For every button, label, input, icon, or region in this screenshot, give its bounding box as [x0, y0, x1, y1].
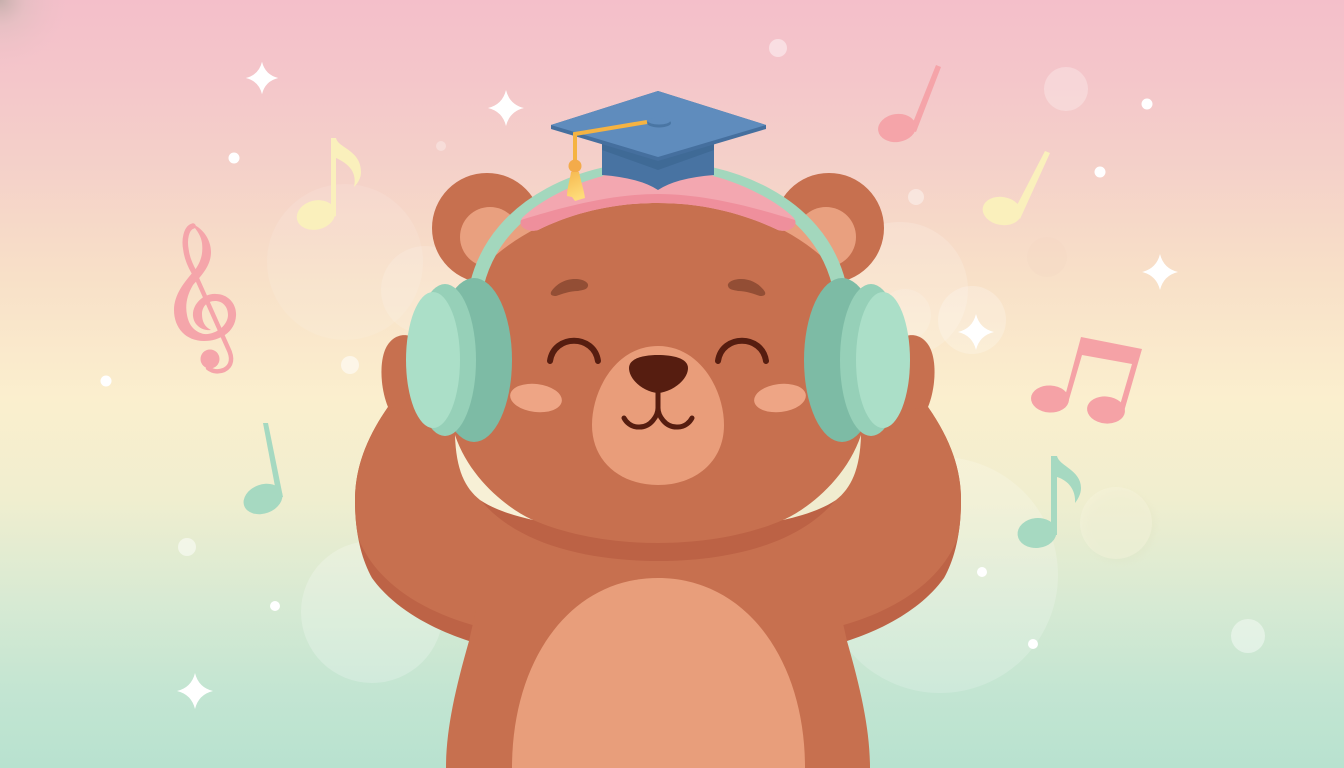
icon: yellow quarter note, right	[980, 151, 1050, 228]
bear arms raised to the headphones	[355, 335, 961, 641]
cheeks	[508, 381, 808, 415]
chin shadow	[470, 485, 846, 561]
eyebrows	[551, 279, 765, 296]
nose	[629, 355, 688, 393]
icon: yellow eighth note, upper left	[294, 138, 361, 234]
tassel	[567, 160, 585, 201]
white dots	[100, 98, 1152, 649]
icon: mint eighth note, right	[1016, 456, 1081, 550]
pink cap lining	[520, 165, 796, 231]
icon: pink beamed notes	[1030, 337, 1142, 425]
bear character	[355, 91, 961, 768]
right ear cup	[804, 278, 910, 442]
bear ears	[432, 173, 884, 290]
graduation cap	[551, 91, 766, 201]
cap board top	[551, 91, 766, 157]
cap board edge	[551, 91, 766, 161]
tassel cord	[575, 122, 647, 162]
left ear cup	[406, 278, 512, 442]
bear head	[451, 203, 865, 543]
bear torso	[446, 610, 870, 768]
background gaps between head and arms	[455, 435, 861, 520]
bear belly	[512, 578, 805, 768]
muzzle	[592, 346, 724, 485]
headband	[477, 168, 839, 284]
icon: pink quarter note, upper right	[876, 65, 941, 145]
sparkles	[177, 62, 1178, 709]
cap base	[602, 140, 714, 190]
cap button	[647, 118, 671, 128]
mouth	[624, 392, 692, 427]
closed smiling eyes	[550, 341, 766, 361]
icon: mint quarter note, left	[239, 423, 287, 519]
icon: pink treble clef	[174, 224, 236, 371]
soft background bubbles	[178, 39, 1265, 693]
